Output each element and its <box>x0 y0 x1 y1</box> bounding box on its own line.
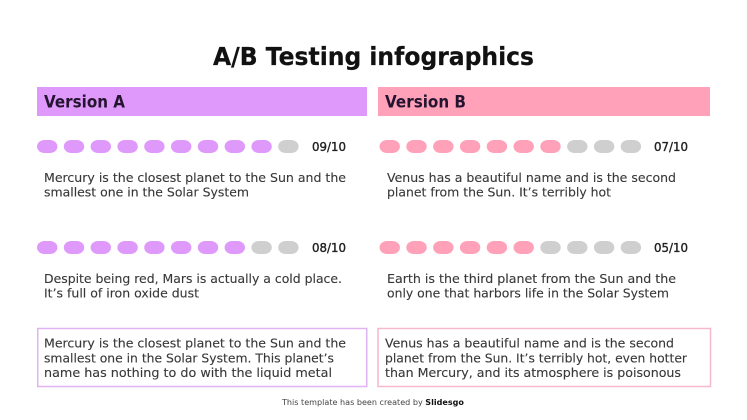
text: Venus short <box>387 170 676 200</box>
rating A1: 09/10 <box>37 139 346 154</box>
text: Mars: It’s full of iron oxide dust <box>44 286 199 300</box>
text: Earth: only one that harbors life in the Solar System <box>387 286 669 300</box>
rating A2: 08/10 <box>37 240 346 255</box>
text: Venus short: Venus has a beautiful name and is the second <box>387 170 676 185</box>
callout: version A summary: Mercury is the closest planet to the Sun and the <box>44 336 346 350</box>
footer credit: This template has been created by Slidesgo <box>281 398 465 407</box>
callout: version B summary: planet from the Sun. It’s terribly hot, even hotter <box>385 350 688 366</box>
panel: version A header: Version A <box>44 92 126 112</box>
panel: version B header <box>378 87 710 116</box>
text: Mars <box>44 271 342 300</box>
title: A/B Testing infographics <box>213 42 534 71</box>
text: Mars: Despite being red, Mars is actually a cold place. <box>44 271 342 286</box>
callout: version A summary: name has nothing to do with the liquid metal <box>44 365 332 380</box>
text: Earth <box>387 271 676 300</box>
panel: version A header <box>37 87 367 116</box>
text: Earth: Earth is the third planet from the Sun and the <box>387 271 676 286</box>
rating B1: 07/10 <box>380 139 688 154</box>
rating B2: 05/10: 05/10 <box>654 240 688 255</box>
rating B1: 07/10: 07/10 <box>654 139 688 154</box>
text: Mercury short: Mercury is the closest planet to the Sun and the <box>44 170 346 185</box>
callout: version B summary: than Mercury, and its atmosphere is poisonous <box>385 365 681 380</box>
callout: version A summary <box>38 328 367 386</box>
rating A1: 09/10: 09/10 <box>312 139 346 154</box>
callout: version B summary <box>378 328 710 386</box>
panel: version B header: Version B <box>385 92 466 112</box>
text: Mercury short: smallest one in the Solar System <box>44 184 249 200</box>
callout: version B summary: Venus has a beautiful name and is the second <box>385 336 674 350</box>
rating A2: 08/10: 08/10 <box>312 240 346 255</box>
text: Venus short: planet from the Sun. It’s terribly hot <box>387 184 611 200</box>
callout: version A summary: smallest one in the Solar System. This planet’s <box>44 350 334 366</box>
text: Mercury short <box>44 170 346 200</box>
rating B2: 05/10 <box>380 240 688 255</box>
